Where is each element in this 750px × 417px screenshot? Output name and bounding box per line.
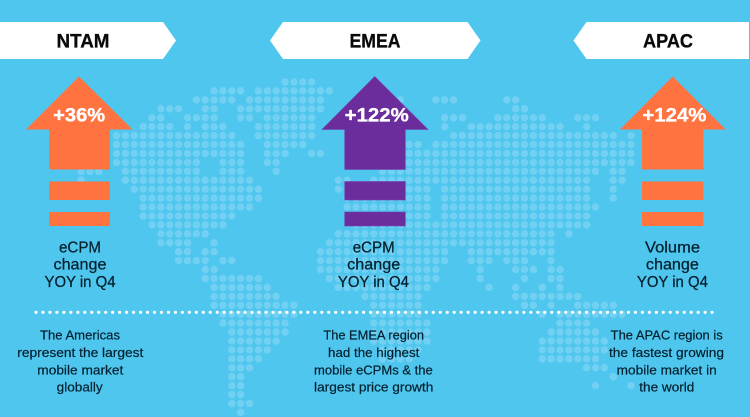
- banner: NTAM: [0, 22, 176, 59]
- metric label: NTAM: [44, 240, 116, 291]
- description: NTAM: mobile market: [37, 364, 124, 378]
- banner: APAC: [574, 22, 749, 59]
- metric label: NTAM: eCPM: [59, 240, 101, 257]
- description: NTAM: [17, 329, 144, 394]
- description: NTAM: represent the largest: [17, 346, 144, 360]
- banner: EMEA: EMEA: [350, 31, 401, 52]
- metric label: EMEA: eCPM: [353, 240, 395, 257]
- metric label: NTAM: change: [54, 256, 106, 274]
- description: EMEA: mobile eCPMs & the: [314, 364, 433, 378]
- arrow: NTAM +36%: [26, 76, 132, 226]
- description: APAC: [609, 329, 724, 394]
- dotted divider: [36, 311, 718, 314]
- metric label: APAC: change: [646, 256, 699, 274]
- metric label: APAC: [637, 240, 708, 291]
- metric label: EMEA: [338, 240, 409, 291]
- arrow: EMEA +122%: +122%: [345, 105, 409, 127]
- metric label: APAC: YOY in Q4: [637, 274, 708, 291]
- banner: APAC: APAC: [643, 31, 693, 52]
- description: APAC: mobile market in: [617, 364, 717, 378]
- banner: NTAM: NTAM: [56, 31, 110, 52]
- metric label: EMEA: change: [347, 256, 400, 274]
- description: APAC: The APAC region is: [611, 329, 723, 343]
- description: EMEA: largest price growth: [314, 380, 433, 394]
- metric label: APAC: Volume: [645, 240, 700, 257]
- arrow: EMEA +122%: [322, 76, 428, 226]
- description: EMEA: The EMEA region: [323, 329, 424, 343]
- banner: EMEA: [270, 22, 480, 59]
- metric label: NTAM: YOY in Q4: [44, 274, 116, 291]
- description: NTAM: The Americas: [40, 329, 120, 343]
- dotted world map: [81, 82, 632, 412]
- description: EMEA: [314, 329, 433, 394]
- description: APAC: the world: [639, 380, 694, 394]
- description: APAC: the fastest growing: [609, 346, 724, 360]
- description: EMEA: had the highest: [328, 346, 420, 360]
- metric label: EMEA: YOY in Q4: [338, 274, 409, 291]
- arrow: APAC +124%: +124%: [642, 105, 706, 127]
- description: NTAM: globally: [57, 380, 103, 394]
- arrow: APAC +124%: [620, 76, 726, 226]
- arrow: NTAM +36%: +36%: [53, 105, 105, 127]
